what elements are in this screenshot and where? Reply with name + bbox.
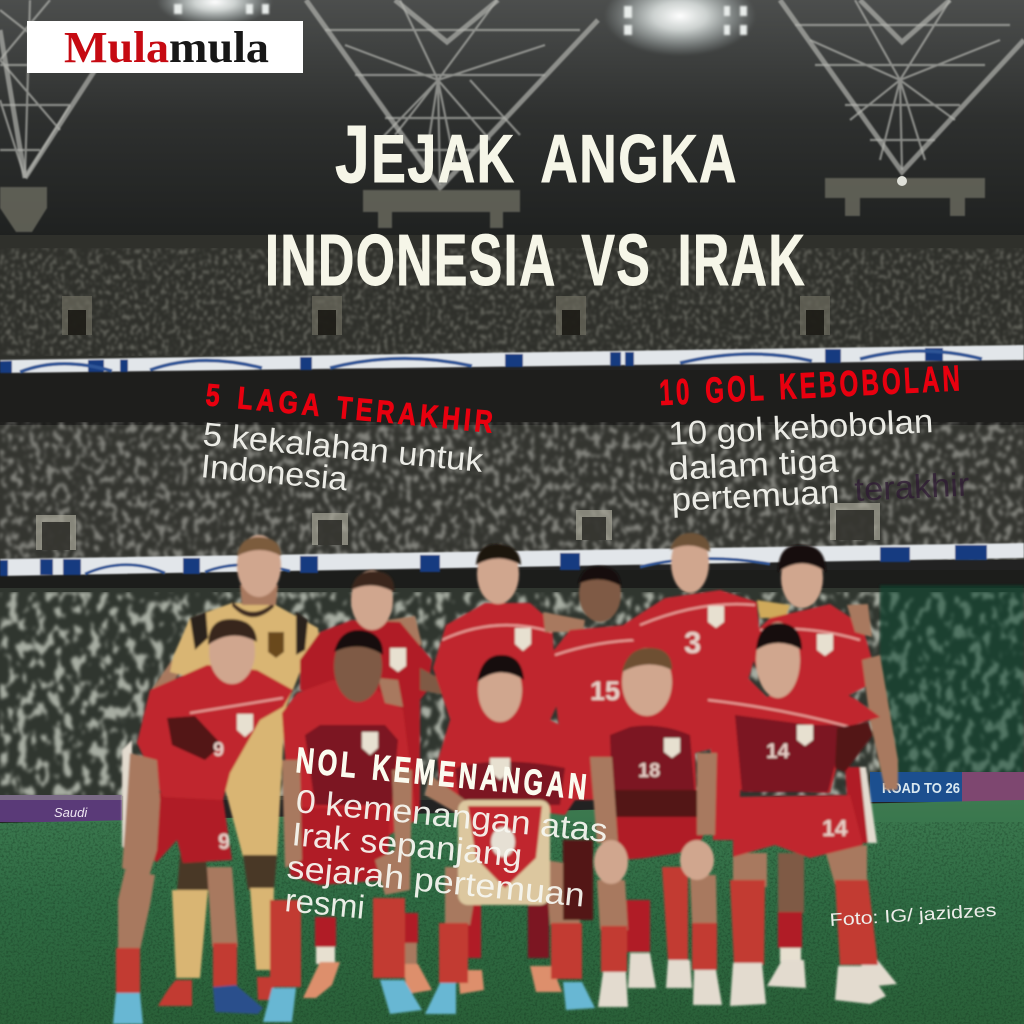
back row player 3 [433, 544, 557, 994]
front player 9 [113, 619, 293, 1024]
middle stand entrances [36, 503, 880, 550]
banner swooshes [85, 559, 770, 574]
pitch [0, 800, 1024, 1024]
front player 18 [563, 648, 722, 1007]
front player center [425, 655, 595, 1014]
pitch texture [0, 822, 1024, 1024]
back row player 5: 3 [684, 625, 701, 660]
truss base blocks [0, 178, 985, 232]
photo credit: Foto: IG/ jazidzes [829, 900, 997, 930]
stadium roof [0, 0, 1024, 236]
front player 18: 18 [638, 760, 660, 782]
stat description: resmi [283, 881, 367, 926]
front player 9: 9 [218, 829, 230, 854]
stat: 10 gol kebobolan [658, 357, 970, 518]
middle crowd [0, 425, 1024, 560]
stat description: Indonesia [199, 447, 350, 497]
floodlight left [157, 0, 273, 26]
upper stand entrance shadows [68, 310, 824, 335]
logo background [27, 21, 303, 73]
front player 9: 9 [213, 739, 224, 761]
stat description: Irak sepanjang [290, 815, 524, 874]
lamp dots [624, 6, 747, 35]
front player 14: 14 [766, 740, 790, 763]
glow [157, 0, 273, 26]
lower crowd texture [0, 592, 1024, 796]
green crowd right [880, 585, 1024, 785]
board panel [0, 797, 122, 822]
logo badge [27, 21, 303, 73]
banner swooshes [20, 351, 982, 372]
board blue [870, 772, 962, 802]
advertising board right [962, 772, 1024, 802]
glow [604, 0, 756, 56]
back row player 2 [300, 570, 452, 998]
upper banner [0, 345, 1024, 373]
board label: ROAD TO 26 [882, 780, 960, 797]
front player 14 [697, 622, 886, 1006]
banner blue marks [0, 348, 943, 373]
stat description: 5 kekalahan untuk [201, 415, 485, 479]
back row player 4: 15 [590, 676, 620, 706]
stat: 5 laga terakhir [199, 377, 498, 497]
banner strip [0, 345, 1024, 373]
middle crowd texture [0, 422, 1024, 560]
front player 12 [263, 630, 422, 1022]
stat: nol kemenangan [283, 739, 609, 926]
back row player 5 [623, 533, 790, 988]
banner strip [0, 543, 1024, 576]
stat heading: NOL KEMENANGAN [294, 739, 592, 808]
title line 2: INDONESIA VS IRAK [265, 221, 806, 301]
board text: Saudi [54, 805, 88, 820]
title line 1: JEJAK ANGKA [335, 109, 738, 200]
upper stand [0, 235, 1024, 360]
lower stand [0, 370, 1024, 560]
upper crowd texture [0, 248, 1024, 356]
lower banner [0, 543, 1024, 576]
back row player 4 [528, 566, 650, 992]
stat description: 0 kemenangan atas [294, 782, 609, 849]
stat description [668, 402, 970, 518]
logo wordmark: Mulamula [64, 23, 269, 72]
entrance interiors [42, 510, 874, 550]
lower crowd base [0, 588, 1024, 800]
advertising board left [0, 795, 122, 822]
title [265, 109, 806, 301]
stat description: terakhir [854, 465, 970, 508]
small roof lamp [897, 176, 907, 186]
stat heading: 5 LAGA TERAKHIR [204, 377, 498, 440]
board top edge [0, 795, 122, 800]
dark strip above lower crowd [0, 570, 1024, 592]
roof trusses [0, 0, 1024, 188]
stat description: 10 gol kebobolan [668, 402, 934, 452]
lamp dots [174, 4, 269, 14]
stat description: dalam tiga [668, 442, 840, 487]
stat description: pertemuan [671, 473, 840, 518]
banner blue marks [0, 545, 987, 576]
floodlight right [604, 0, 756, 56]
team photo: players [113, 533, 898, 1024]
stat description [283, 782, 609, 926]
upper stand entrances [62, 296, 830, 335]
back row goalkeeper [150, 535, 322, 1006]
front player 14: 14 [822, 815, 848, 841]
advertising board road to 26 [870, 772, 962, 802]
back row player 6 [747, 545, 898, 988]
stat description: sejarah pertemuan [285, 848, 586, 914]
